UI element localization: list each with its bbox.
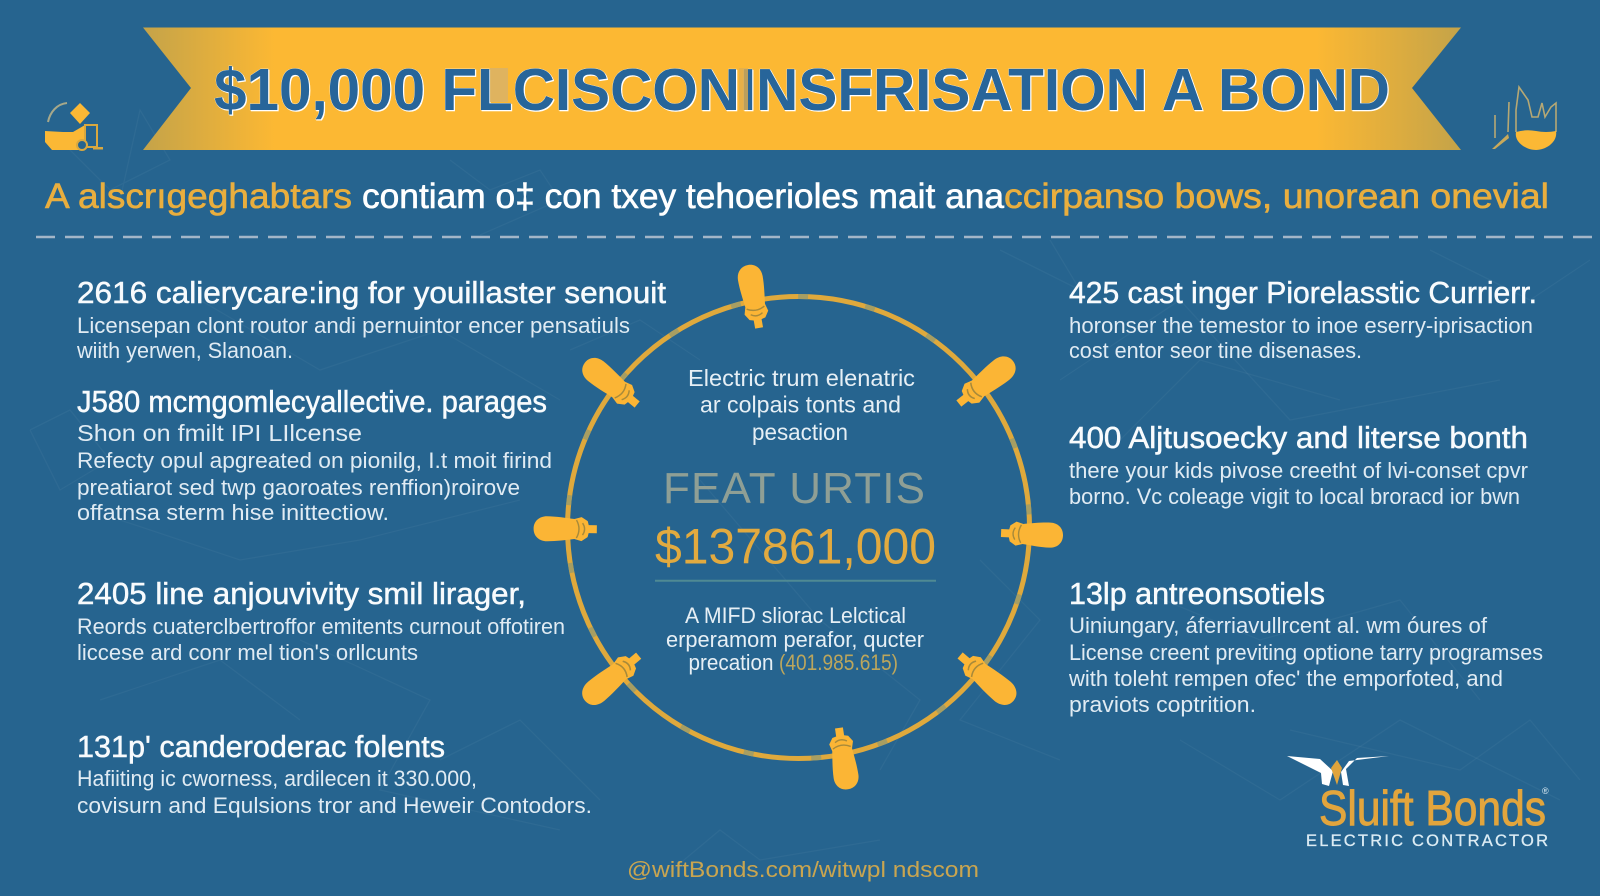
ring diagram — [533, 263, 1064, 791]
center text: intro: ar colpais tonts and — [700, 392, 901, 418]
left column: feature 2: preatiarot sed twp gaoroates renffion)roirove — [77, 475, 520, 500]
propeller: right — [1001, 521, 1064, 548]
right column: feature 3: praviots coptrition. — [1069, 692, 1256, 717]
propeller: bottom — [827, 726, 860, 791]
subtitle: contiam o‡ con txey tehoerioles mait ana — [362, 177, 1005, 216]
icon: right skyline flask — [1492, 87, 1556, 150]
title banner — [143, 28, 1461, 150]
left column: feature 2 — [77, 384, 552, 525]
propeller: left — [533, 516, 597, 542]
right column: feature 3: 13lp antreonsotiels — [1069, 576, 1325, 611]
left column: feature 4: 131p' canderoderac folents — [77, 729, 445, 764]
left column: feature 3: liccese ard conr mel tion's orllcunts — [77, 640, 418, 665]
center text: intro — [688, 365, 915, 445]
right column: feature 2 — [1069, 420, 1528, 509]
center text: features label: FEAT URTIS — [663, 464, 925, 513]
title text: $10,000 FLCISCONINSFRISATION A BOND — [214, 57, 1390, 123]
center text: intro: Electric trum elenatric — [688, 365, 915, 391]
logo — [1287, 756, 1549, 850]
propeller: top — [736, 263, 771, 330]
left column: feature 2: J580 mcmgomlecyallective. parages — [77, 384, 547, 419]
subtitle: ccirpanso bows, unorean onevial — [1004, 177, 1549, 216]
propeller: upper right — [951, 351, 1021, 413]
center text: description: erperamom perafor, qucter — [666, 627, 924, 652]
right column: feature 1 — [1069, 275, 1537, 363]
propeller: lower right — [952, 646, 1022, 710]
center text: description: (401.985.615) — [779, 650, 898, 675]
left column: feature 2: offatnsa sterm hise inittectiow. — [77, 500, 389, 525]
left column: feature 3: Reords cuaterclbertroffor emitents curnout offotiren — [77, 614, 565, 639]
left column: feature 1: wiith yerwen, Slanoan. — [76, 338, 293, 363]
icon: left tool bucket — [45, 103, 103, 150]
center text: amount: $137861,000 — [655, 518, 936, 574]
icon: logo wings — [1287, 756, 1389, 786]
right column: feature 3: License creent previting optione tarry programses — [1069, 640, 1543, 665]
propeller: upper left — [577, 353, 645, 414]
right column: feature 3 — [1068, 576, 1543, 717]
subtitle: A alscrıgeghabtars — [45, 177, 352, 216]
left column: feature 4: covisurn and Equlsions tror and Heweir Contodors. — [77, 793, 592, 818]
right column: feature 2: 400 Aljtusoecky and literse bonth — [1069, 420, 1528, 455]
left column: feature 1: Licensepan clont routor andi pernuintor encer pensatiuls — [77, 313, 630, 338]
logo: Sluift Bonds — [1319, 782, 1546, 836]
left column: feature 2: Refecty opul apgreated on pionilg, I.t moit firind — [77, 448, 552, 473]
right column: feature 1: 425 cast inger Piorelasstic Currierr. — [1069, 275, 1537, 310]
left column: feature 4: Hafiiting ic cworness, ardilecen it 330.000, — [77, 766, 477, 791]
right column: feature 1: cost entor seor tine disenases. — [1069, 338, 1362, 363]
propeller: lower left — [577, 646, 647, 710]
right column: feature 1: horonser the temestor to inoe eserry-iprisaction — [1069, 313, 1533, 338]
right column: feature 3: Uiniungary, áferriavullrcent al. wm óures of — [1069, 613, 1488, 638]
left column: feature 1 — [76, 275, 666, 363]
left column: feature 3: 2405 line anjouvivity smil lirager, — [77, 576, 526, 611]
left column: feature 2: Shon on fmilt IPI LIlcense — [77, 420, 362, 446]
center text: description: precation — [688, 650, 774, 675]
right column: feature 2: borno. Vc coleage vigit to local broracd ior bwn — [1069, 484, 1520, 509]
left column: feature 1: 2616 calierycare:ing for youillaster senouit — [77, 275, 666, 310]
footer url: @wiftBonds.com/witwpl ndscom — [627, 857, 979, 882]
center text: description — [666, 603, 924, 675]
left column: feature 4 — [77, 729, 592, 818]
subtitle — [45, 177, 1549, 216]
logo: ® — [1542, 786, 1549, 796]
right column: feature 3: with toleht rempen ofec' the emporfoted, and — [1068, 666, 1503, 691]
logo: ELECTRIC CONTRACTOR — [1306, 832, 1548, 850]
left column: feature 3 — [77, 576, 565, 665]
center text: description: A MIFD sliorac Lelctical — [685, 603, 906, 628]
right column: feature 2: there your kids pivose creetht of lvi-conset cpvr — [1069, 458, 1528, 483]
center text: intro: pesaction — [752, 419, 848, 445]
